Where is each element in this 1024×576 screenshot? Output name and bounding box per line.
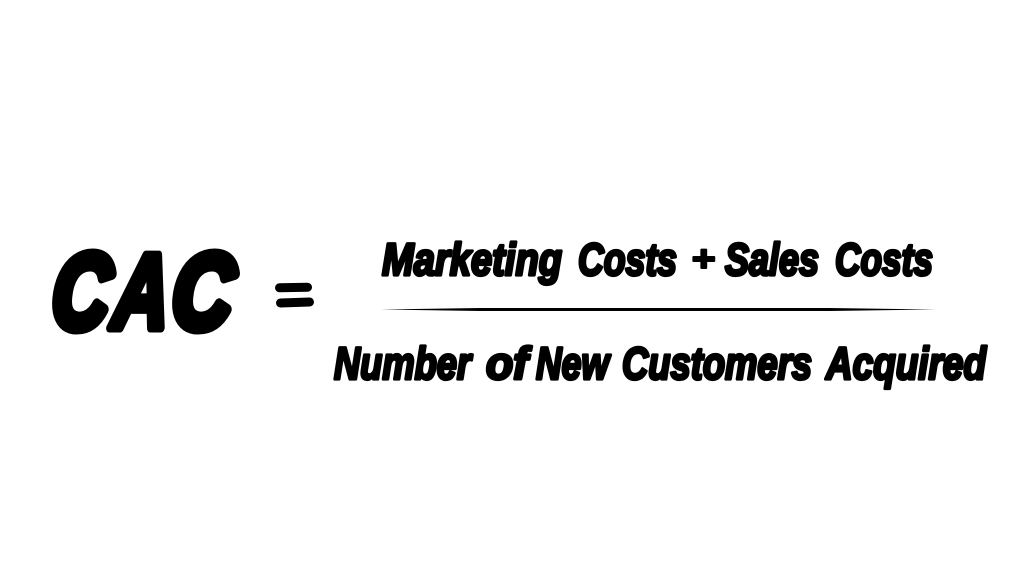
text: denominator, number of new customers acquired xyxy=(334,338,987,389)
text: denominator, number of new customers acquired: of xyxy=(486,338,532,389)
icon: equals sign xyxy=(275,283,314,308)
text: denominator, number of new customers acquired: Number xyxy=(334,338,473,389)
text: numerator, marketing costs plus sales costs: Costs xyxy=(578,234,677,285)
heading: CAC xyxy=(48,232,239,351)
heading: CAC: C xyxy=(168,232,239,351)
text: denominator, number of new customers acquired: Customers xyxy=(622,338,812,389)
heading: CAC: A xyxy=(107,232,175,351)
text: numerator, marketing costs plus sales costs: Sales xyxy=(725,234,819,285)
text: numerator, marketing costs plus sales costs: Costs xyxy=(835,234,933,285)
heading: CAC: C xyxy=(48,232,116,351)
text: denominator, number of new customers acquired: New xyxy=(536,338,611,389)
text: numerator, marketing costs plus sales costs: Marketing xyxy=(382,234,562,285)
text: denominator, number of new customers acquired: Acquired xyxy=(825,338,987,389)
fraction bar xyxy=(381,308,936,311)
text: numerator, marketing costs plus sales costs: + xyxy=(691,238,715,279)
text: numerator, marketing costs plus sales costs xyxy=(382,234,933,285)
